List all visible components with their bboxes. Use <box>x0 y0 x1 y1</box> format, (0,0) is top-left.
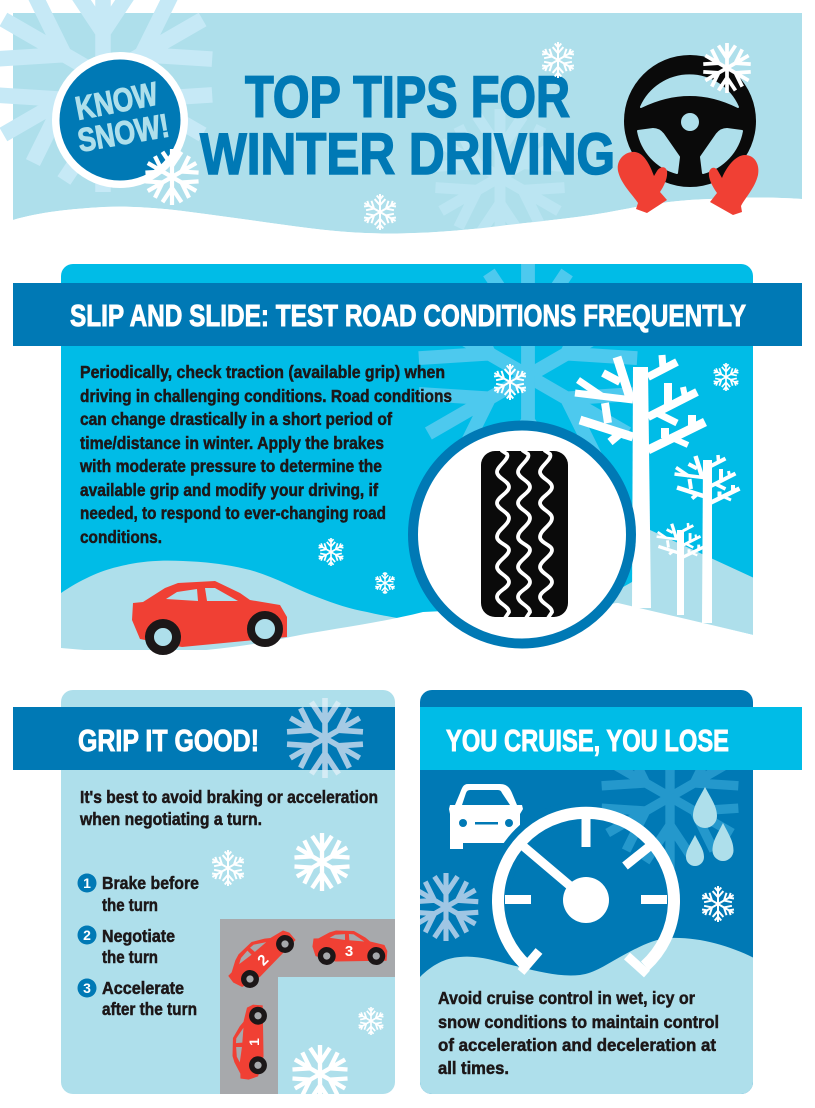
body text <box>79 362 452 547</box>
body text: available grip and modify your driving, if <box>80 480 378 500</box>
snowflakes <box>411 873 736 941</box>
small snowflakes <box>317 363 740 594</box>
body text: Avoid cruise control in wet, icy or <box>438 988 695 1008</box>
car numbers: 1 <box>246 1038 262 1046</box>
pale snowflake centre <box>430 109 570 245</box>
icon: left mitten <box>618 152 667 213</box>
numbered steps: the turn <box>102 947 158 967</box>
numbered steps: Brake before <box>102 873 199 893</box>
snow slope right <box>600 530 754 635</box>
snow hill <box>420 938 754 1100</box>
heading bar: YOU CRUISE, YOU LOSE <box>446 723 729 758</box>
body text: snow conditions to maintain control <box>438 1012 719 1032</box>
numbered steps: after the turn <box>102 999 197 1019</box>
car numbers: 2 <box>254 951 272 969</box>
car numbers <box>246 943 353 1046</box>
numbered steps: 2 <box>83 927 91 943</box>
numbered steps <box>78 873 199 1019</box>
panel: you cruise you lose <box>411 690 802 1100</box>
white ground <box>61 603 753 650</box>
body text: conditions. <box>80 527 162 547</box>
numbered steps: the turn <box>102 895 158 915</box>
body text <box>438 988 719 1078</box>
numbered steps: Negotiate <box>102 926 175 946</box>
body text: all times. <box>438 1058 509 1078</box>
pale snowflake behind tyre <box>418 264 638 453</box>
section heading bar <box>13 283 802 346</box>
intro text: It's best to avoid braking or acceleration <box>80 787 378 807</box>
body text: time/distance in winter. Apply the brakes <box>80 433 384 453</box>
icon: right mitten <box>709 155 758 215</box>
road diagram <box>220 919 395 1094</box>
numbered steps: 1 <box>83 875 91 891</box>
badge: know snow: KNOW <box>72 75 161 127</box>
small white snowflakes <box>143 42 753 230</box>
icon: tyre in circle <box>413 426 631 644</box>
snowflakes <box>210 833 385 1103</box>
body text: can change drastically in a short period of <box>80 409 392 429</box>
badge: know snow <box>52 52 188 188</box>
icon: speedometer <box>498 812 674 974</box>
title <box>200 65 615 187</box>
panel: grip it good <box>13 690 395 1103</box>
snowflake on heading <box>286 707 364 770</box>
icon: car front <box>449 784 523 849</box>
heading bar <box>13 707 395 770</box>
numbered steps: 3 <box>83 980 91 996</box>
white snow bank cover <box>13 198 802 258</box>
title: WINTER DRIVING <box>200 122 615 187</box>
panel: slip and slide <box>13 261 802 660</box>
icon: steering wheel <box>624 55 756 187</box>
intro text <box>79 787 378 829</box>
body text: with moderate pressure to determine the <box>79 456 382 476</box>
icon: red car <box>132 581 287 650</box>
heading bar <box>420 707 802 770</box>
large pale snowflake left <box>0 0 222 192</box>
intro text: when negotiating a turn. <box>79 809 262 829</box>
car 2 <box>228 930 296 988</box>
numbered steps: Accelerate <box>102 978 184 998</box>
badge: know snow: SNOW! <box>75 106 172 159</box>
header banner <box>0 0 802 258</box>
icon: water drops <box>686 787 734 866</box>
car 3 <box>312 930 388 965</box>
snow hill left <box>61 560 397 650</box>
car numbers: 3 <box>345 943 353 960</box>
heading bar: GRIP IT GOOD! <box>78 723 259 758</box>
trees <box>575 355 740 623</box>
car 1 <box>232 1004 267 1080</box>
snowflake behind heading (pale part) <box>284 698 366 778</box>
pale snowflake <box>595 725 745 869</box>
title: TOP TIPS FOR <box>245 65 570 130</box>
body text: Periodically, check traction (available grip) when <box>80 362 445 382</box>
body text: driving in challenging conditions. Road conditions <box>80 386 452 406</box>
body text: of acceleration and deceleration at <box>438 1035 716 1055</box>
body text: needed, to respond to ever-changing road <box>80 503 386 523</box>
